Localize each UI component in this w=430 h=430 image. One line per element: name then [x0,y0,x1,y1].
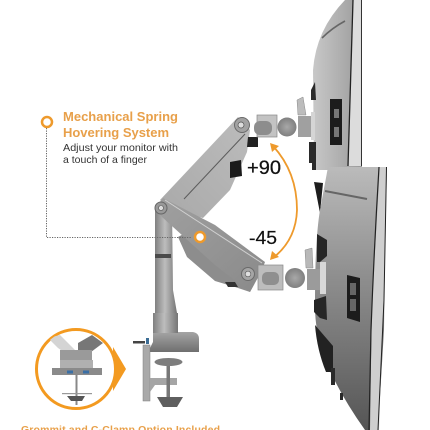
upper arm [160,117,250,218]
range arrow [270,143,297,260]
callout leader line [46,128,192,238]
lower arm underside [178,225,262,292]
icon: arm ring [195,232,205,242]
upper arm slot [230,160,242,178]
clamp assembly [133,313,199,407]
heading: Mechanical Spring [63,109,178,124]
inset: grommet detail [36,330,126,408]
pole [155,207,177,313]
lower arm [156,198,265,292]
monitor arm [155,97,326,313]
top hinge [234,97,315,147]
icon: heading ring [42,117,52,127]
top monitor [309,0,362,213]
heading: Hovering System [63,125,169,140]
description: Adjust your monitor with [63,142,178,154]
elbow pivot [155,202,167,214]
label: -45: -45 [249,228,277,248]
lower monitor [314,167,387,430]
description: a touch of a finger [63,154,147,166]
label: +90: +90 [247,158,281,179]
lower hinge [242,248,326,294]
